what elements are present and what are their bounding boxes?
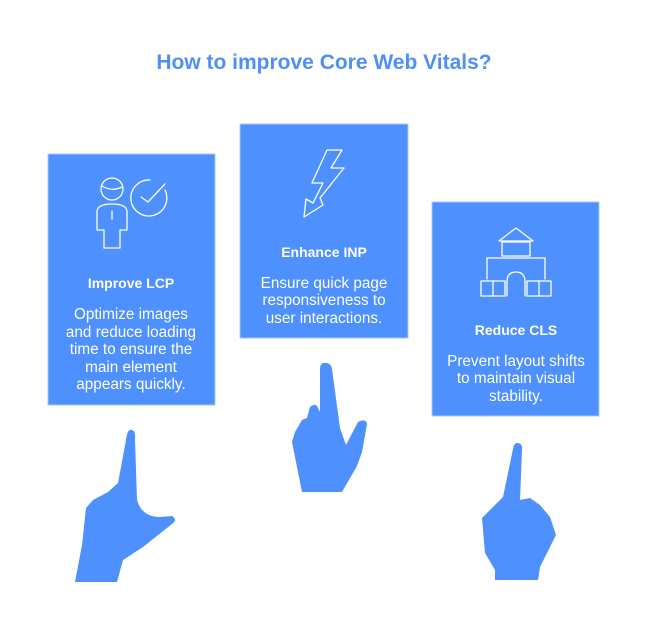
body text: Prevent layout shifts: [447, 353, 585, 370]
hand 3: [482, 443, 556, 580]
panel: Improve LCP: [48, 154, 215, 405]
icon: person with check: [97, 178, 167, 248]
icon: lightning: [304, 150, 344, 217]
body text: user interactions.: [266, 310, 382, 327]
body text: Optimize images: [74, 306, 188, 323]
body text: stability.: [489, 388, 543, 405]
body text: time to ensure the: [70, 341, 192, 358]
heading: Reduce CLS: [475, 322, 557, 338]
heading: Improve LCP: [88, 275, 174, 291]
body text: and reduce loading: [66, 324, 196, 341]
body text: responsiveness to: [262, 292, 386, 309]
icon: building blocks: [481, 228, 551, 296]
body text: appears quickly.: [76, 376, 186, 393]
hand 2: [292, 363, 367, 492]
panel: Reduce CLS: [432, 202, 599, 416]
body text: to maintain visual: [457, 370, 575, 387]
title: How to improve Core Web Vitals?: [156, 51, 492, 74]
hand 1: [75, 430, 175, 582]
heading: Enhance INP: [281, 244, 367, 260]
panel: Enhance INP: [240, 124, 408, 338]
body text: main element: [85, 359, 178, 376]
body text: Ensure quick page: [261, 275, 387, 292]
